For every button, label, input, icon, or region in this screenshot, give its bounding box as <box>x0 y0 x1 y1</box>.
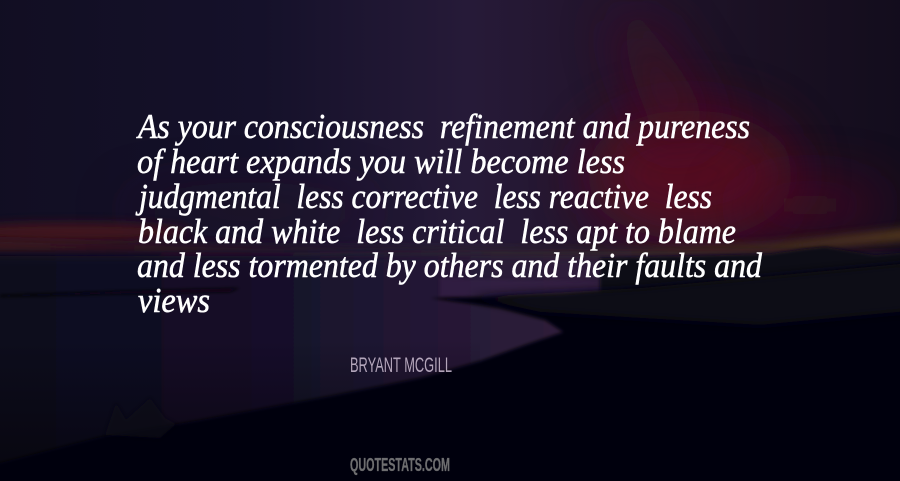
background: sunset sky <box>0 0 900 300</box>
quote text: judgmental less corrective less reactive less <box>135 177 712 216</box>
background: water and bay <box>0 256 900 481</box>
quote text <box>135 107 762 320</box>
quote text: black and white less critical less apt to blame <box>138 212 736 251</box>
quote text: As your consciousness refinement and pureness <box>136 107 750 146</box>
watermark: QUOTESTATS.COM <box>350 455 450 475</box>
background: distant hills <box>600 247 900 300</box>
quote text: and less tormented by others and their faults and <box>137 246 762 285</box>
quote text: views <box>138 281 210 320</box>
background: dark headland <box>0 262 900 481</box>
author name: BRYANT MCGILL <box>350 354 452 377</box>
quote text: of heart expands you will become less <box>137 142 625 181</box>
